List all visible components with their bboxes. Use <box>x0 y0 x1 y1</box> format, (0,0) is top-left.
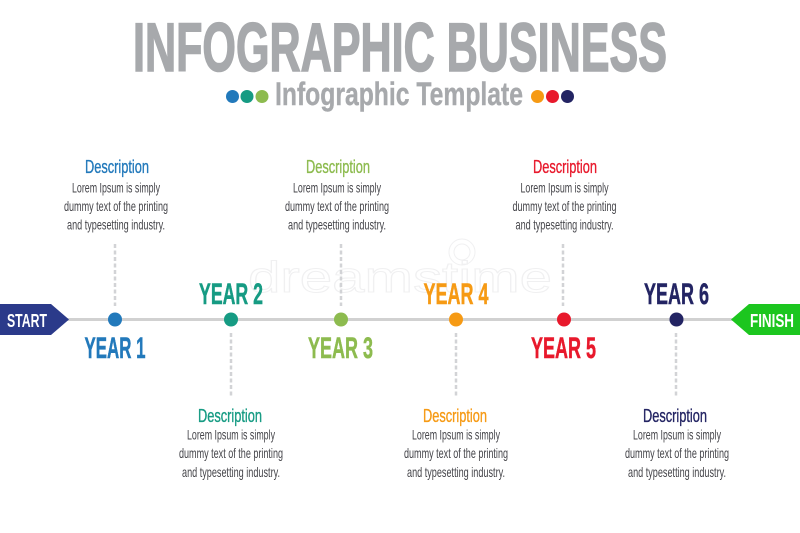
heading: year 5 description: Description <box>533 157 597 177</box>
milestone: year 1 <box>64 157 168 365</box>
label: year 4: YEAR 4 <box>424 278 489 311</box>
text: year 3 description: Lorem Ipsum is simply <box>293 180 381 196</box>
text: year 5 description: and typesetting industry. <box>516 216 614 232</box>
connector: year 4 <box>455 333 457 397</box>
heading: year 1 description: Description <box>85 157 149 177</box>
marker: year 2 <box>224 312 238 326</box>
label: year 2: YEAR 2 <box>199 278 263 311</box>
text: year 6 description: and typesetting industry. <box>628 464 726 480</box>
milestone: year 6 <box>625 278 729 480</box>
text: year 2 description: and typesetting industry. <box>182 464 280 480</box>
label: year 1: YEAR 1 <box>84 332 146 365</box>
subtitle: Infographic Template <box>275 76 523 112</box>
text: year 2 description <box>179 426 283 480</box>
label: year 3: YEAR 3 <box>308 332 373 365</box>
icon: right subtitle dots <box>531 90 574 103</box>
heading: year 3 description: Description <box>306 157 370 177</box>
timeline line <box>65 318 735 321</box>
heading: year 4 description: Description <box>423 406 487 426</box>
text: year 6 description <box>625 426 729 480</box>
heading: year 6 description: Description <box>643 406 707 426</box>
text: year 1 description: Lorem Ipsum is simply <box>72 180 160 196</box>
label: year 5: YEAR 5 <box>531 332 596 365</box>
text: year 6 description: Lorem Ipsum is simply <box>633 426 721 442</box>
connector: year 1 <box>114 244 116 306</box>
text: year 6 description: dummy text of the printing <box>625 445 729 461</box>
text: year 4 description: dummy text of the printing <box>404 445 508 461</box>
text: year 4 description <box>404 426 508 480</box>
connector: year 2 <box>230 333 232 397</box>
text: year 2 description: Lorem Ipsum is simply <box>187 426 275 442</box>
text: year 3 description <box>285 180 389 232</box>
finish arrow <box>731 304 800 335</box>
text: year 5 description <box>512 180 616 232</box>
milestone: year 4 <box>404 278 508 480</box>
marker: year 3 <box>334 312 348 326</box>
connector: year 5 <box>562 244 564 306</box>
watermark: dreamstime <box>248 253 552 302</box>
text: year 1 description: dummy text of the printing <box>64 198 168 214</box>
label: year 6: YEAR 6 <box>644 278 709 311</box>
text: year 3 description: dummy text of the printing <box>285 198 389 214</box>
marker: year 4 <box>449 312 463 326</box>
milestone: year 5 <box>512 157 616 365</box>
marker: year 5 <box>557 312 571 326</box>
heading: year 2 description: Description <box>198 406 262 426</box>
text: year 2 description: dummy text of the printing <box>179 445 283 461</box>
marker: year 1 <box>108 312 122 326</box>
text: year 1 description: and typesetting industry. <box>67 216 165 232</box>
connector: year 6 <box>675 333 677 397</box>
text: year 5 description: Lorem Ipsum is simply <box>520 180 608 196</box>
text: year 4 description: and typesetting industry. <box>407 464 505 480</box>
milestone: year 3 <box>285 157 389 365</box>
start arrow: START <box>7 311 47 331</box>
icon: left subtitle dots <box>226 90 268 103</box>
connector: year 3 <box>340 244 342 306</box>
text: year 4 description: Lorem Ipsum is simply <box>412 426 500 442</box>
text: year 1 description <box>64 180 168 232</box>
text: year 5 description: dummy text of the printing <box>512 198 616 214</box>
milestone: year 2 <box>179 278 283 480</box>
start arrow <box>0 304 69 335</box>
marker: year 6 <box>670 312 684 326</box>
text: year 3 description: and typesetting industry. <box>288 216 386 232</box>
watermark <box>248 239 552 302</box>
